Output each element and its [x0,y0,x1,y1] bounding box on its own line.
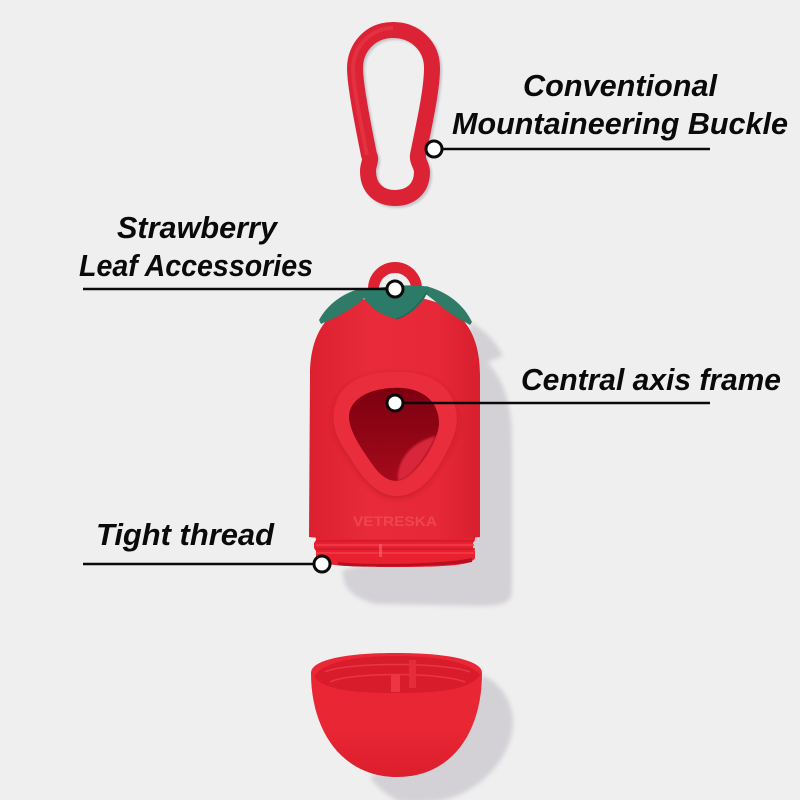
dispenser body [309,296,480,539]
callout line: buckle [426,141,710,157]
label: Strawberry Leaf Accessories: Strawberry [117,210,279,245]
callout line: axis frame [387,395,710,411]
thread neck [314,533,475,567]
carabiner buckle [353,28,434,200]
shadow: body [343,322,512,606]
leaves [319,285,472,325]
label: Conventional Mountaineering Buckle [452,68,788,141]
label: Conventional Mountaineering Buckle: Conventional [523,68,718,103]
hanging loop [374,268,416,310]
inner highlight [398,436,436,481]
brand mark: VETRESKA [353,513,437,529]
label: Central axis frame: Central axis frame [521,362,781,397]
window frame [333,372,457,498]
lower cap [311,653,482,777]
label: Tight thread: Tight thread [96,517,275,552]
label: Strawberry Leaf Accessories [79,210,313,283]
shadow: cap [370,675,513,800]
callout line: leaf [83,281,403,297]
label: Conventional Mountaineering Buckle: Mountaineering Buckle [452,106,788,141]
label: Strawberry Leaf Accessories: Leaf Accessories [79,248,313,283]
cap interior [314,656,480,693]
callout line: thread [83,556,330,572]
window hole [349,388,439,481]
